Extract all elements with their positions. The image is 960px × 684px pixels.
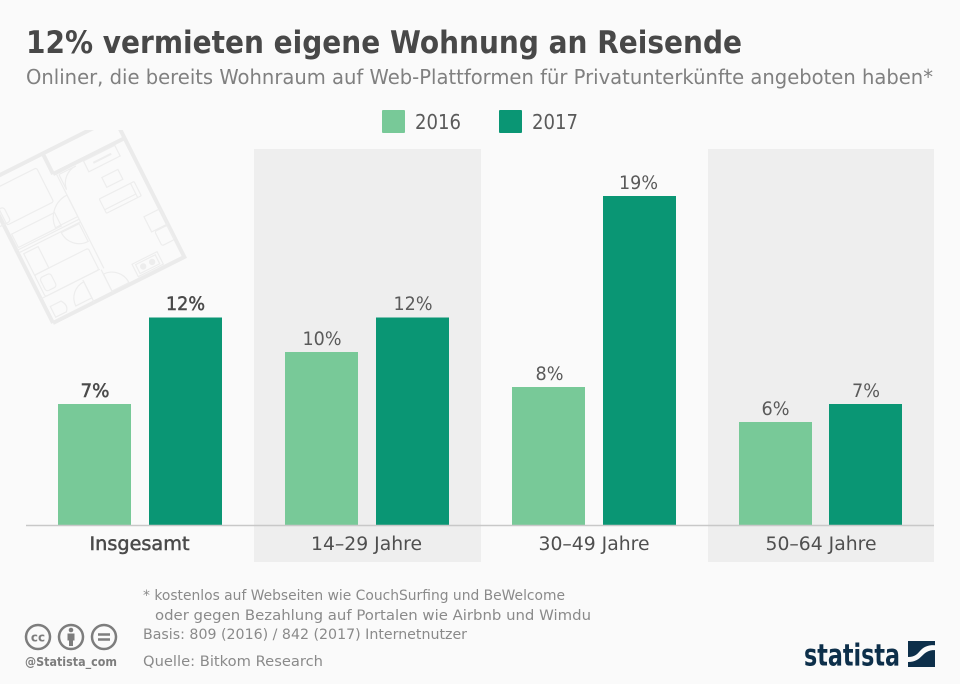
group: 50–64 Jahre: 7% <box>852 381 880 402</box>
legend item: 2016 <box>382 110 461 134</box>
group: Insgesamt: 12% <box>166 294 205 315</box>
icon: attribution person <box>59 625 83 649</box>
logo wordmark: statista <box>804 638 900 674</box>
group: Insgesamt: Insgesamt <box>90 534 190 555</box>
icon: apartment floor plan <box>0 130 187 324</box>
footnote: * kostenlos auf Webseiten wie CouchSurfing und BeWelcome <box>143 588 565 604</box>
logo icon <box>908 641 935 667</box>
source: Quelle: Bitkom Research <box>143 654 323 670</box>
legend item: 2016: 2016 <box>415 110 461 134</box>
group: Insgesamt <box>58 294 222 555</box>
footnote: oder gegen Bezahlung auf Portalen wie Airbnb und Wimdu <box>155 608 591 624</box>
group: 30–49 Jahre: 8% <box>536 364 564 385</box>
panel: 50–64 Jahre background <box>708 149 934 562</box>
social handle: @Statista_com <box>25 655 117 670</box>
footnote <box>143 588 591 643</box>
panel: 14–29 Jahre background <box>254 149 481 562</box>
legend item: 2017: 2017 <box>532 110 578 134</box>
group: 50–64 Jahre: 6% <box>762 399 790 420</box>
subtitle: Onliner, die bereits Wohnraum auf Web-Plattformen für Privatunterkünfte angeboten haben* <box>26 65 933 89</box>
title: 12% vermieten eigene Wohnung an Reisende <box>26 25 742 61</box>
icon: no derivatives equals <box>92 625 116 649</box>
group: 30–49 Jahre: 19% <box>619 173 658 194</box>
group: 14–29 Jahre: 10% <box>302 329 342 350</box>
group: Insgesamt: 7% <box>80 381 110 402</box>
group: 14–29 Jahre <box>285 294 449 555</box>
group: 14–29 Jahre: 14–29 Jahre <box>311 534 422 555</box>
group: 50–64 Jahre: 50–64 Jahre <box>766 534 876 555</box>
legend <box>382 110 578 134</box>
legend item: 2017 <box>499 110 578 134</box>
icon: cc: cc <box>31 630 45 644</box>
group: 30–49 Jahre <box>512 173 676 555</box>
footnote: Basis: 809 (2016) / 842 (2017) Internetnutzer <box>143 627 467 643</box>
group: 50–64 Jahre <box>739 381 902 555</box>
group: 14–29 Jahre: 12% <box>394 294 432 315</box>
bar chart <box>58 173 902 555</box>
icons: creative commons licence <box>26 625 116 649</box>
statista logo <box>804 638 935 674</box>
group: 30–49 Jahre: 30–49 Jahre <box>538 534 650 555</box>
